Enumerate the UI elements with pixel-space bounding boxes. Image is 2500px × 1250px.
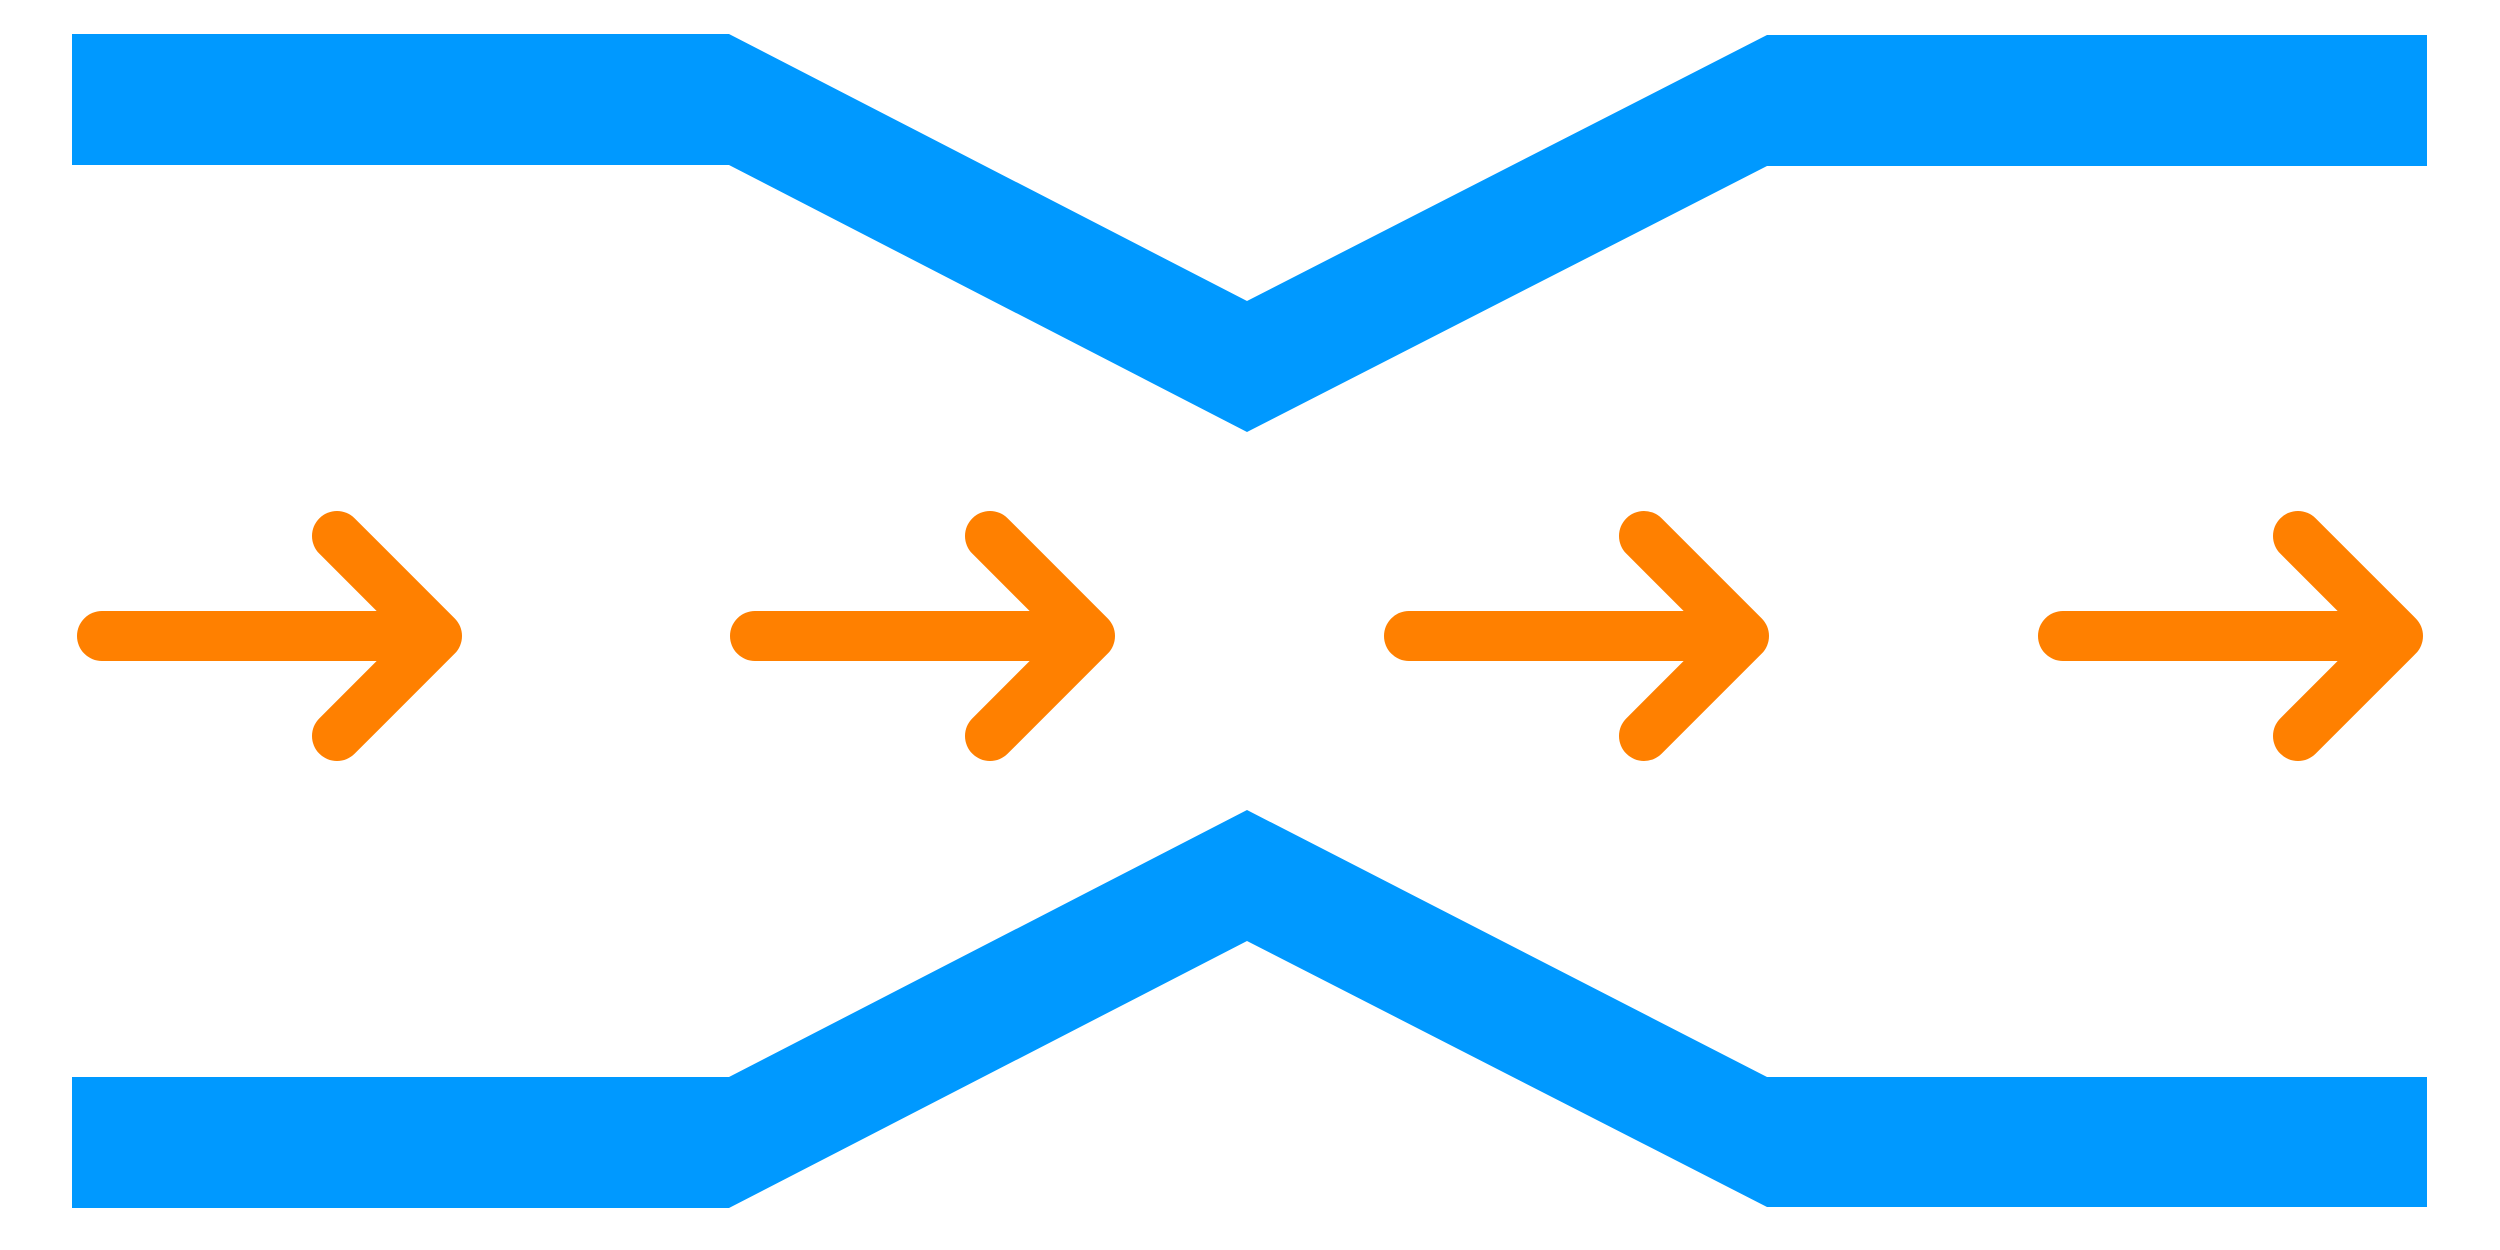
bottom wall	[72, 810, 2427, 1208]
arrow 3	[1409, 536, 1744, 736]
arrow 2	[755, 536, 1090, 736]
arrow 1	[102, 536, 437, 736]
arrow 4	[2063, 536, 2398, 736]
top wall	[72, 34, 2427, 432]
